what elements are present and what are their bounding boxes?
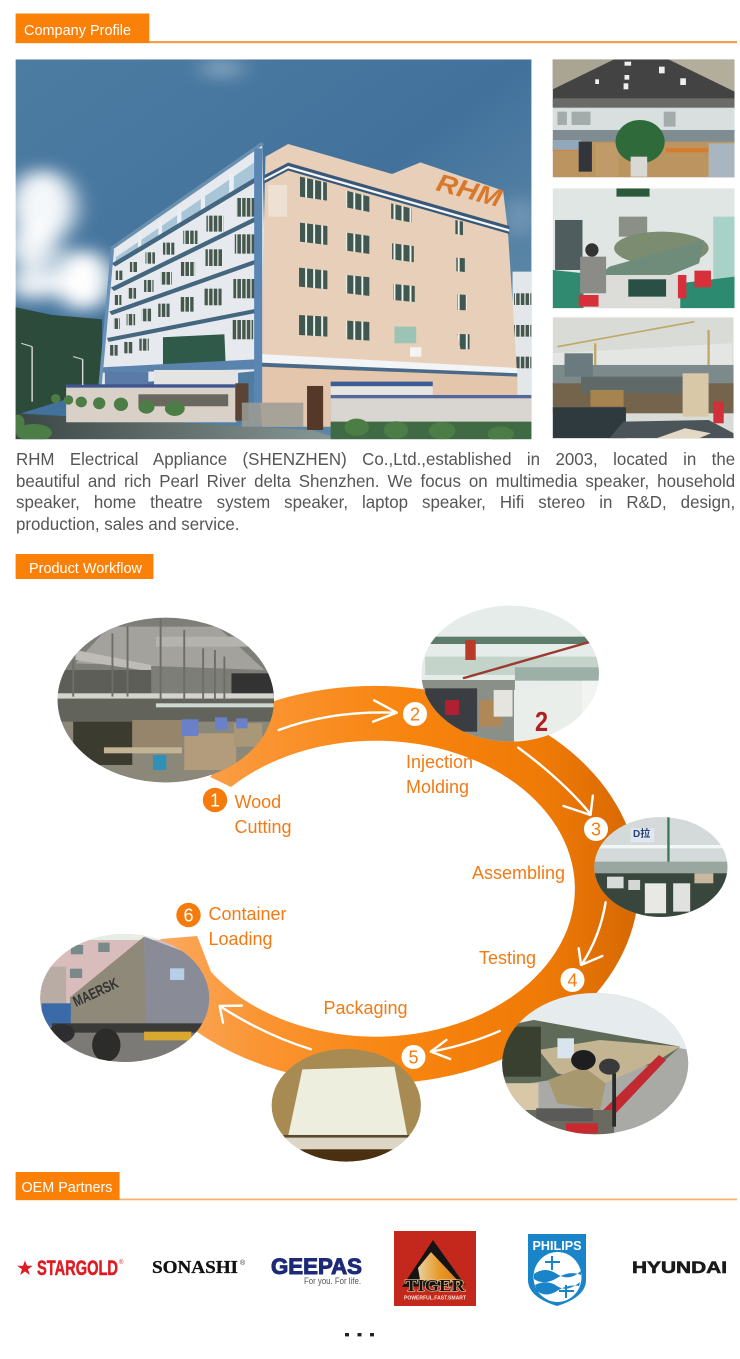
- step 1 badge and label: Wood: [234, 792, 281, 812]
- photo: production floor: [553, 317, 734, 438]
- step 2 badge and label: Injection: [406, 752, 473, 772]
- logo: Hyundai: HYUNDAI: [632, 1258, 727, 1277]
- numeral on machine: 2: [535, 706, 548, 737]
- logo: Stargold: ®: [119, 1259, 124, 1266]
- step 3 badge and label: 3: [591, 820, 601, 840]
- workflow ring: [160, 686, 639, 1084]
- photo 4: testing: [501, 993, 690, 1136]
- step 4 badge and label: Testing: [479, 948, 536, 968]
- step 4 badge and label: 4: [567, 970, 578, 990]
- section heading: OEM Partners: OEM Partners: [22, 1179, 112, 1196]
- logo: Stargold: STARGOLD: [37, 1257, 118, 1280]
- company introduction paragraph: RHM Electrical Appliance (SHENZHEN) Co.,Ltd.,established in 2003, located in the: [16, 449, 735, 469]
- step 6 badge and label: Container: [208, 904, 287, 924]
- photo: RHM factory building: [7, 59, 534, 441]
- step 2 badge and label: [403, 702, 473, 797]
- step 1 badge and label: [203, 788, 292, 837]
- logo: Tiger: TIGER: [405, 1276, 466, 1295]
- company introduction paragraph: [16, 449, 735, 534]
- logo: Sonashi: SONASHI: [152, 1257, 238, 1277]
- company introduction paragraph: beautiful and rich Pearl River delta Shenzhen. We focus on multimedia speaker, household: [16, 471, 735, 491]
- logo: Philips shield: PHILIPS: [532, 1239, 582, 1253]
- photo: assembly line with staff: [553, 188, 735, 308]
- step 2 badge and label: Molding: [406, 777, 469, 797]
- step 1 badge and label: Cutting: [234, 817, 292, 837]
- photo 3: assembling: [593, 817, 730, 918]
- step 6 badge and label: [176, 903, 287, 949]
- logo: Sonashi: ®: [240, 1259, 246, 1267]
- section heading: Product Workflow: Product Workflow: [29, 560, 142, 577]
- logo: Tiger: POWERFUL.FAST.SMART: [404, 1296, 466, 1302]
- section heading: Company Profile: [16, 14, 737, 43]
- ellipsis: more partners: [345, 1333, 374, 1336]
- step 1 badge and label: 1: [210, 790, 220, 810]
- container lettering: MAERSK: [71, 975, 121, 1011]
- company introduction paragraph: speaker, home theatre system speaker, laptop speaker, Hifi stereo in R&D, design,: [16, 492, 735, 512]
- logo: Tiger: [394, 1231, 476, 1306]
- logo: Stargold: [17, 1257, 124, 1280]
- step 5 badge and label: Packaging: [324, 998, 408, 1018]
- wing: [99, 143, 267, 387]
- step 6 badge and label: Loading: [208, 929, 273, 949]
- photo 5: packaging: [269, 1048, 423, 1163]
- logo: Geepas: For you. For life.: [304, 1276, 361, 1286]
- step 2 badge and label: 2: [410, 704, 420, 724]
- step 3 badge and label: [472, 817, 608, 883]
- company introduction paragraph: production, sales and service.: [16, 514, 239, 534]
- photo: office interior: [553, 59, 735, 177]
- photo 1: wood cutting: [57, 617, 275, 785]
- walls and gate: [66, 385, 236, 422]
- section heading: Product Workflow: [16, 554, 153, 579]
- logo: Philips shield: [528, 1234, 586, 1306]
- logo: Geepas: GEEPAS: [271, 1254, 362, 1279]
- section heading: Company Profile: Company Profile: [24, 22, 131, 39]
- step 5 badge and label: 5: [408, 1048, 419, 1068]
- front face: [260, 144, 517, 427]
- workflow arrows: [220, 700, 606, 1059]
- sign on line: D拉: D拉: [633, 827, 650, 840]
- step 3 badge and label: Assembling: [472, 863, 565, 883]
- section heading: OEM Partners: [16, 1172, 737, 1200]
- step 4 badge and label: [479, 948, 584, 992]
- step 6 badge and label: 6: [183, 906, 194, 926]
- logo sign: RHM on building: RHM: [433, 169, 506, 213]
- photo 6: container loading: [38, 933, 213, 1063]
- photo 2: injection molding: [420, 605, 601, 743]
- step 5 badge and label: [324, 998, 426, 1069]
